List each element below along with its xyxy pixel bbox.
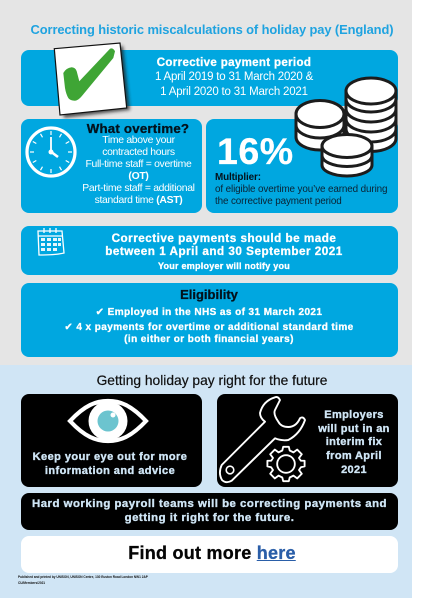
text: eye advice: Keep your eye out for more (33, 451, 187, 463)
panel: grey upper background (0, 0, 412, 365)
icon: calendar (37, 228, 65, 256)
statistic: 16%: 16% (217, 130, 294, 172)
heading: eligibility: Eligibility (180, 287, 238, 302)
text: payroll teams: Hard working payroll teams will be correcting payments and (32, 498, 387, 510)
text: interim fix: will put in an (318, 423, 390, 435)
panel: corrective payment period (21, 50, 398, 106)
heading: corrective payment period: Corrective payment period (157, 57, 311, 69)
text: publisher imprint: CU/Members/2021 (18, 581, 45, 585)
text: payroll teams: getting it right for the future. (125, 512, 294, 524)
text: publisher imprint: Published and printed by UNISON, UNISON Centre, 130 Euston Road London NW1 2AP (18, 575, 148, 579)
text: multiplier explanation: of eligible overtime you’ve earned during (215, 184, 387, 195)
text: eligibility criterion two (64, 322, 354, 345)
panel: eye advice (21, 394, 202, 487)
text: find out more link: Find out more here (128, 543, 296, 563)
text: eligibility criterion one: ✔ Employed in the NHS as of 31 March 2021 (96, 307, 322, 318)
text: payment dates: 1 April 2020 to 31 March 2021 (160, 86, 308, 98)
text: overtime definition (82, 135, 195, 206)
text: employer notice: Your employer will notify you (158, 260, 290, 270)
text: eligibility criterion two: (in either or both financial years) (124, 334, 294, 345)
text: interim fix: Employers (324, 409, 384, 421)
text: overtime definition: contracted hours (102, 147, 175, 158)
icon: eye (67, 398, 149, 444)
text: eligibility criterion two: ✔ 4 x payments for overtime or additional standard time (64, 322, 354, 333)
icon: clock (25, 126, 77, 178)
heading: what overtime: What overtime? (87, 121, 189, 136)
panel: payroll teams (21, 493, 398, 530)
panel: eligibility (21, 283, 398, 357)
text: overtime definition: Full-time staff = overtime (85, 159, 192, 170)
text: payment window: Corrective payments should be made (112, 232, 336, 244)
text: interim fix: from April (326, 450, 382, 462)
text: multiplier explanation (215, 172, 387, 207)
text: payment dates: 1 April 2019 to 31 March 2020 & (155, 71, 313, 83)
icon: stacks of coins (294, 76, 398, 178)
text: publisher imprint (18, 575, 148, 585)
text: overtime definition: (OT) (128, 171, 149, 182)
text: payroll teams (32, 498, 387, 524)
text: interim fix (318, 409, 390, 476)
panel: interim fix (217, 394, 398, 487)
text: payment window (105, 232, 343, 258)
panel: find out more (21, 536, 398, 573)
panel: light blue lower background (0, 365, 412, 598)
panel: what overtime (21, 119, 202, 213)
panel: 16% multiplier (206, 119, 398, 213)
text: interim fix: 2021 (341, 464, 367, 476)
text: payment dates (155, 71, 314, 98)
title: Correcting historic miscalculations of holiday pay (England) (31, 22, 393, 37)
icon: green tick on card (54, 42, 132, 119)
text: overtime definition: Time above your (102, 135, 175, 146)
text: multiplier explanation: the corrective payment period (215, 196, 342, 207)
text: overtime definition: standard time (AST) (95, 195, 182, 206)
heading: getting holiday pay right: Getting holiday pay right for the future (97, 373, 327, 388)
text: interim fix: interim fix (326, 436, 382, 448)
text: eye advice: information and advice (45, 465, 175, 477)
text: multiplier explanation: Multiplier: (215, 172, 261, 182)
text: eye advice (33, 451, 187, 477)
icon: wrench and gear (218, 396, 306, 484)
text: overtime definition: Part-time staff = additional (82, 183, 195, 194)
panel: corrective payment timing (21, 226, 398, 275)
text: payment window: between 1 April and 30 September 2021 (105, 245, 343, 258)
